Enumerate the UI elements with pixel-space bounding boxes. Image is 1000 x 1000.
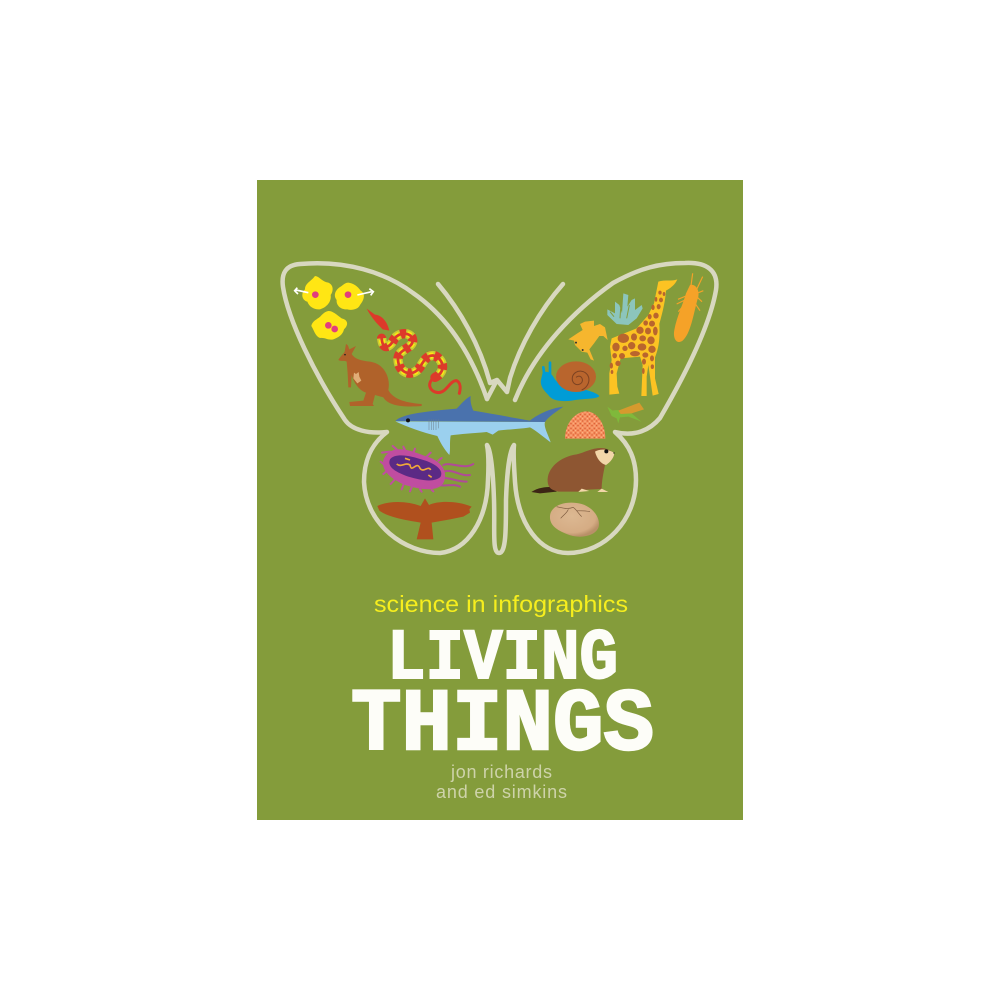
icon: snake	[367, 309, 460, 393]
icon: snail	[541, 361, 599, 401]
antennae	[438, 284, 563, 399]
upper-right wing animals	[541, 273, 703, 423]
series title: science in infographics	[374, 591, 628, 617]
icon: shark	[395, 396, 563, 455]
icon: coral	[607, 293, 643, 325]
icon: frog	[568, 321, 608, 361]
icon: giraffe	[609, 279, 677, 396]
icon: kangaroo	[338, 344, 422, 406]
icon: flower right	[335, 283, 373, 310]
icon: bacterium	[381, 446, 473, 492]
icon: egg	[550, 503, 599, 537]
lower animals	[377, 396, 615, 539]
author: jon richards: jon richards	[450, 762, 552, 782]
icon: flower bottom	[311, 311, 347, 340]
upper-left wing animals	[295, 276, 460, 406]
icon: flower left	[295, 276, 333, 309]
main title: THINGS: THINGS	[351, 677, 654, 776]
icon: coral dome	[565, 411, 605, 439]
icon: marmot	[531, 448, 615, 493]
icon: termite	[674, 273, 703, 342]
cover background	[257, 180, 743, 820]
icon: grasshopper	[607, 403, 644, 423]
author: ed simkins: and ed simkins	[436, 782, 567, 802]
icon: bird	[377, 498, 472, 539]
main title: LIVING: LIVING	[387, 620, 618, 700]
butterfly outline	[283, 263, 716, 553]
